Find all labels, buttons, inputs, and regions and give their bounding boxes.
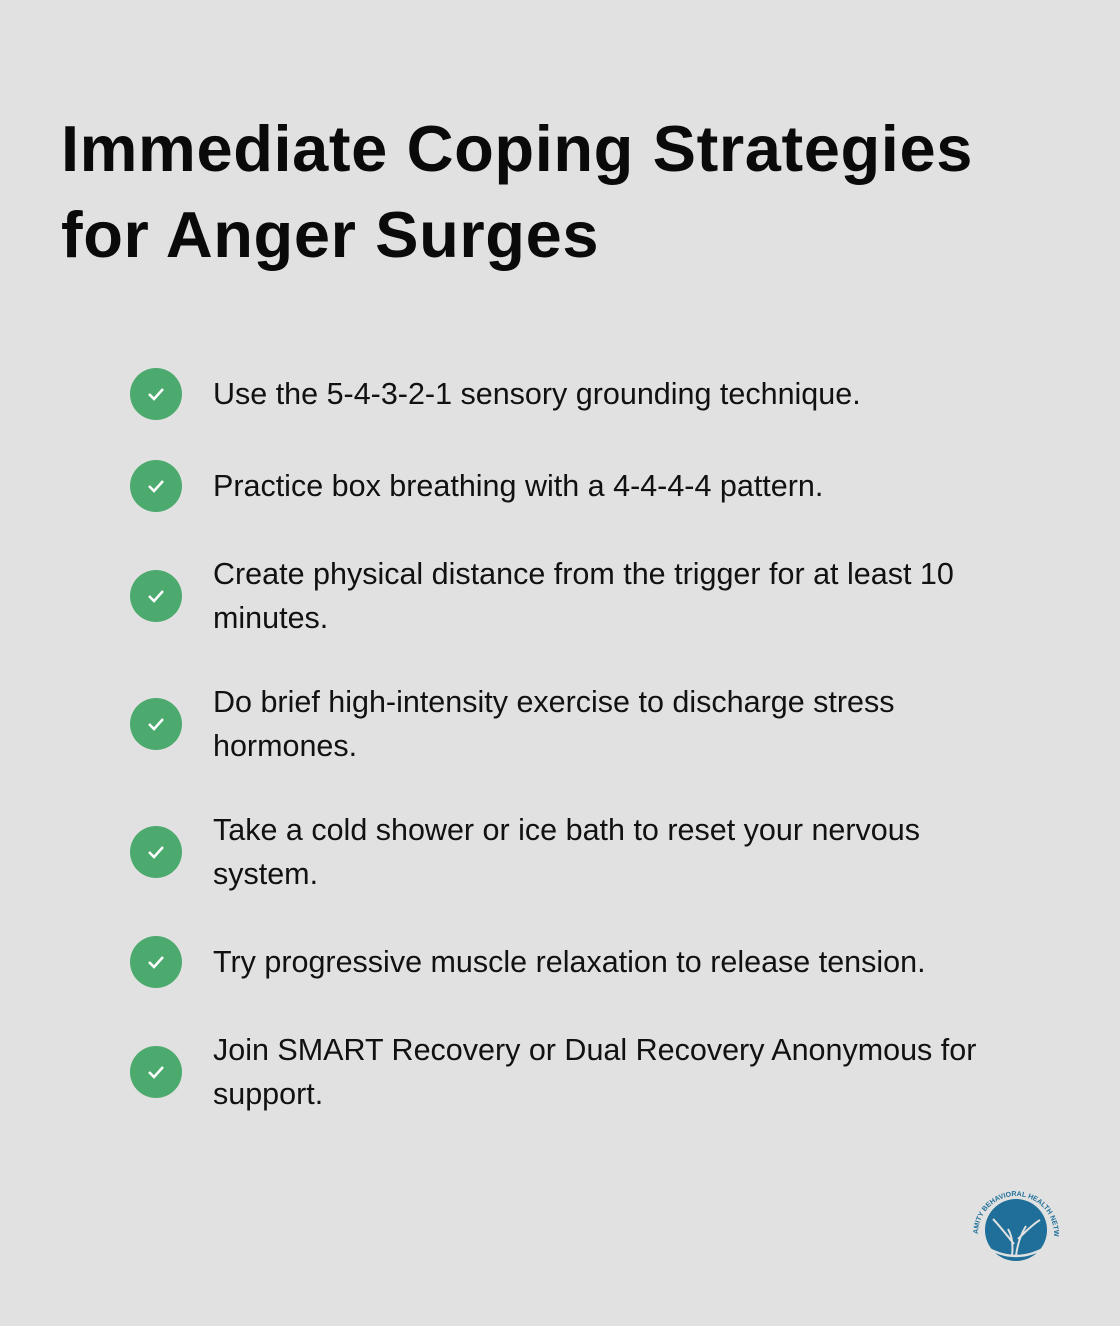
item 2: Practice box breathing with a 4-4-4-4 pattern. bbox=[213, 469, 823, 503]
item 4: hormones. bbox=[213, 729, 357, 763]
item 7 bbox=[130, 1033, 976, 1111]
title: Immediate Coping Strategies bbox=[61, 112, 973, 185]
logo bbox=[973, 1191, 1059, 1261]
item 6 bbox=[130, 936, 926, 988]
item 1: Use the 5-4-3-2-1 sensory grounding technique. bbox=[213, 377, 861, 411]
item 7: Join SMART Recovery or Dual Recovery Anonymous for bbox=[213, 1033, 976, 1067]
item 7: support. bbox=[213, 1077, 323, 1111]
item 5 bbox=[130, 813, 920, 891]
title: for Anger Surges bbox=[61, 198, 599, 271]
item 4 bbox=[130, 685, 894, 763]
item 1 bbox=[130, 368, 861, 420]
item 5: Take a cold shower or ice bath to reset your nervous bbox=[213, 813, 920, 847]
item 6: Try progressive muscle relaxation to release tension. bbox=[213, 945, 926, 979]
item 5: system. bbox=[213, 857, 318, 891]
item 2 bbox=[130, 460, 823, 512]
item 4: Do brief high-intensity exercise to discharge stress bbox=[213, 685, 894, 719]
item 3 bbox=[130, 557, 954, 635]
item 3: Create physical distance from the trigger for at least 10 bbox=[213, 557, 954, 591]
title bbox=[61, 112, 973, 271]
item 3: minutes. bbox=[213, 601, 328, 635]
